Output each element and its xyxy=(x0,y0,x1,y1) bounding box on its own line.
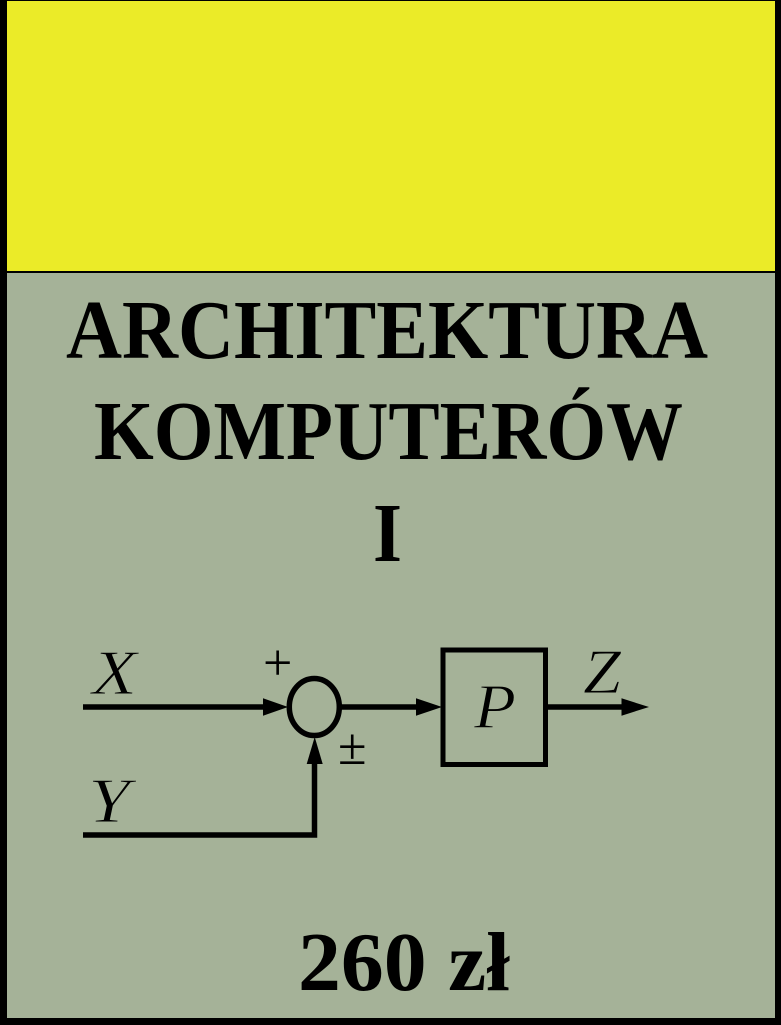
title: ARCHITEKTURA xyxy=(66,284,708,377)
block diagram: + xyxy=(263,635,292,692)
grey-green lower panel xyxy=(7,273,775,1018)
block diagram xyxy=(83,635,649,836)
title xyxy=(66,284,708,580)
block diagram: P xyxy=(473,672,516,742)
block diagram: Y xyxy=(88,766,137,836)
block diagram: Z xyxy=(583,637,622,707)
yellow top panel xyxy=(7,1,775,271)
block diagram: X xyxy=(88,638,140,708)
price: 260 zł xyxy=(298,916,510,1009)
block diagram: ± xyxy=(338,719,367,776)
title: KOMPUTERÓW xyxy=(94,385,683,478)
title: I xyxy=(373,487,402,580)
